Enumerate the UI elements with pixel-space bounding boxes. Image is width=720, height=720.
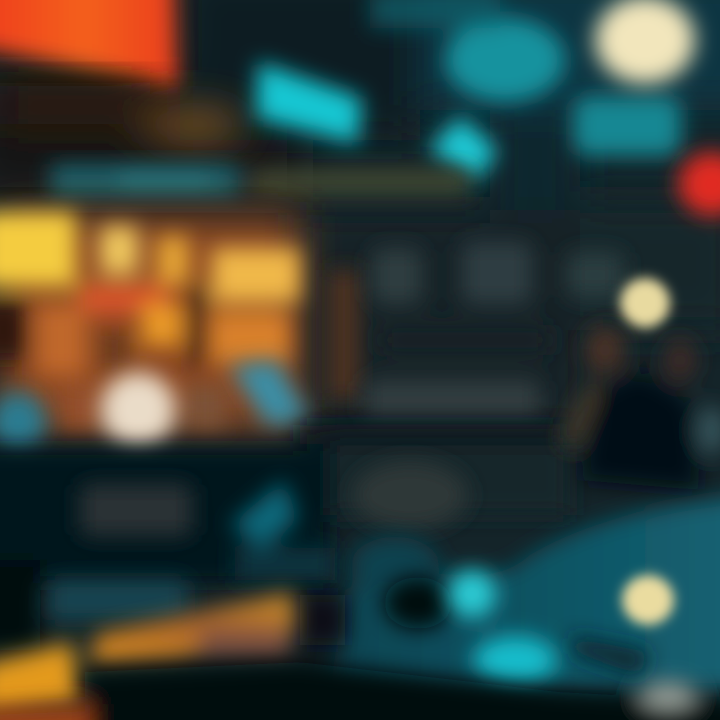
panel: cyan sign <box>256 62 362 144</box>
panel: teal upper signs <box>370 0 681 180</box>
panel: red-orange sign <box>0 0 178 88</box>
upper dark building <box>0 0 720 430</box>
grey lower panels <box>48 461 468 620</box>
white round object <box>100 372 176 448</box>
amber awning glow <box>0 85 245 143</box>
silhouette figure <box>560 326 720 490</box>
grey building panels <box>365 242 623 420</box>
blue objects <box>0 360 310 452</box>
brown pillar <box>328 270 360 400</box>
dark foreground <box>0 662 720 720</box>
cream lamp <box>595 0 695 84</box>
panel: storefront <box>0 212 310 452</box>
teal sign strip <box>50 164 470 198</box>
dark lower band <box>0 425 570 650</box>
cream spot <box>622 575 674 625</box>
dark spots on surface <box>300 577 650 676</box>
glow cyan spots <box>448 570 557 684</box>
red sign at right <box>678 152 720 216</box>
street lamp <box>620 278 670 328</box>
teal curved surface <box>330 495 720 690</box>
yellow road stripe <box>0 592 296 716</box>
